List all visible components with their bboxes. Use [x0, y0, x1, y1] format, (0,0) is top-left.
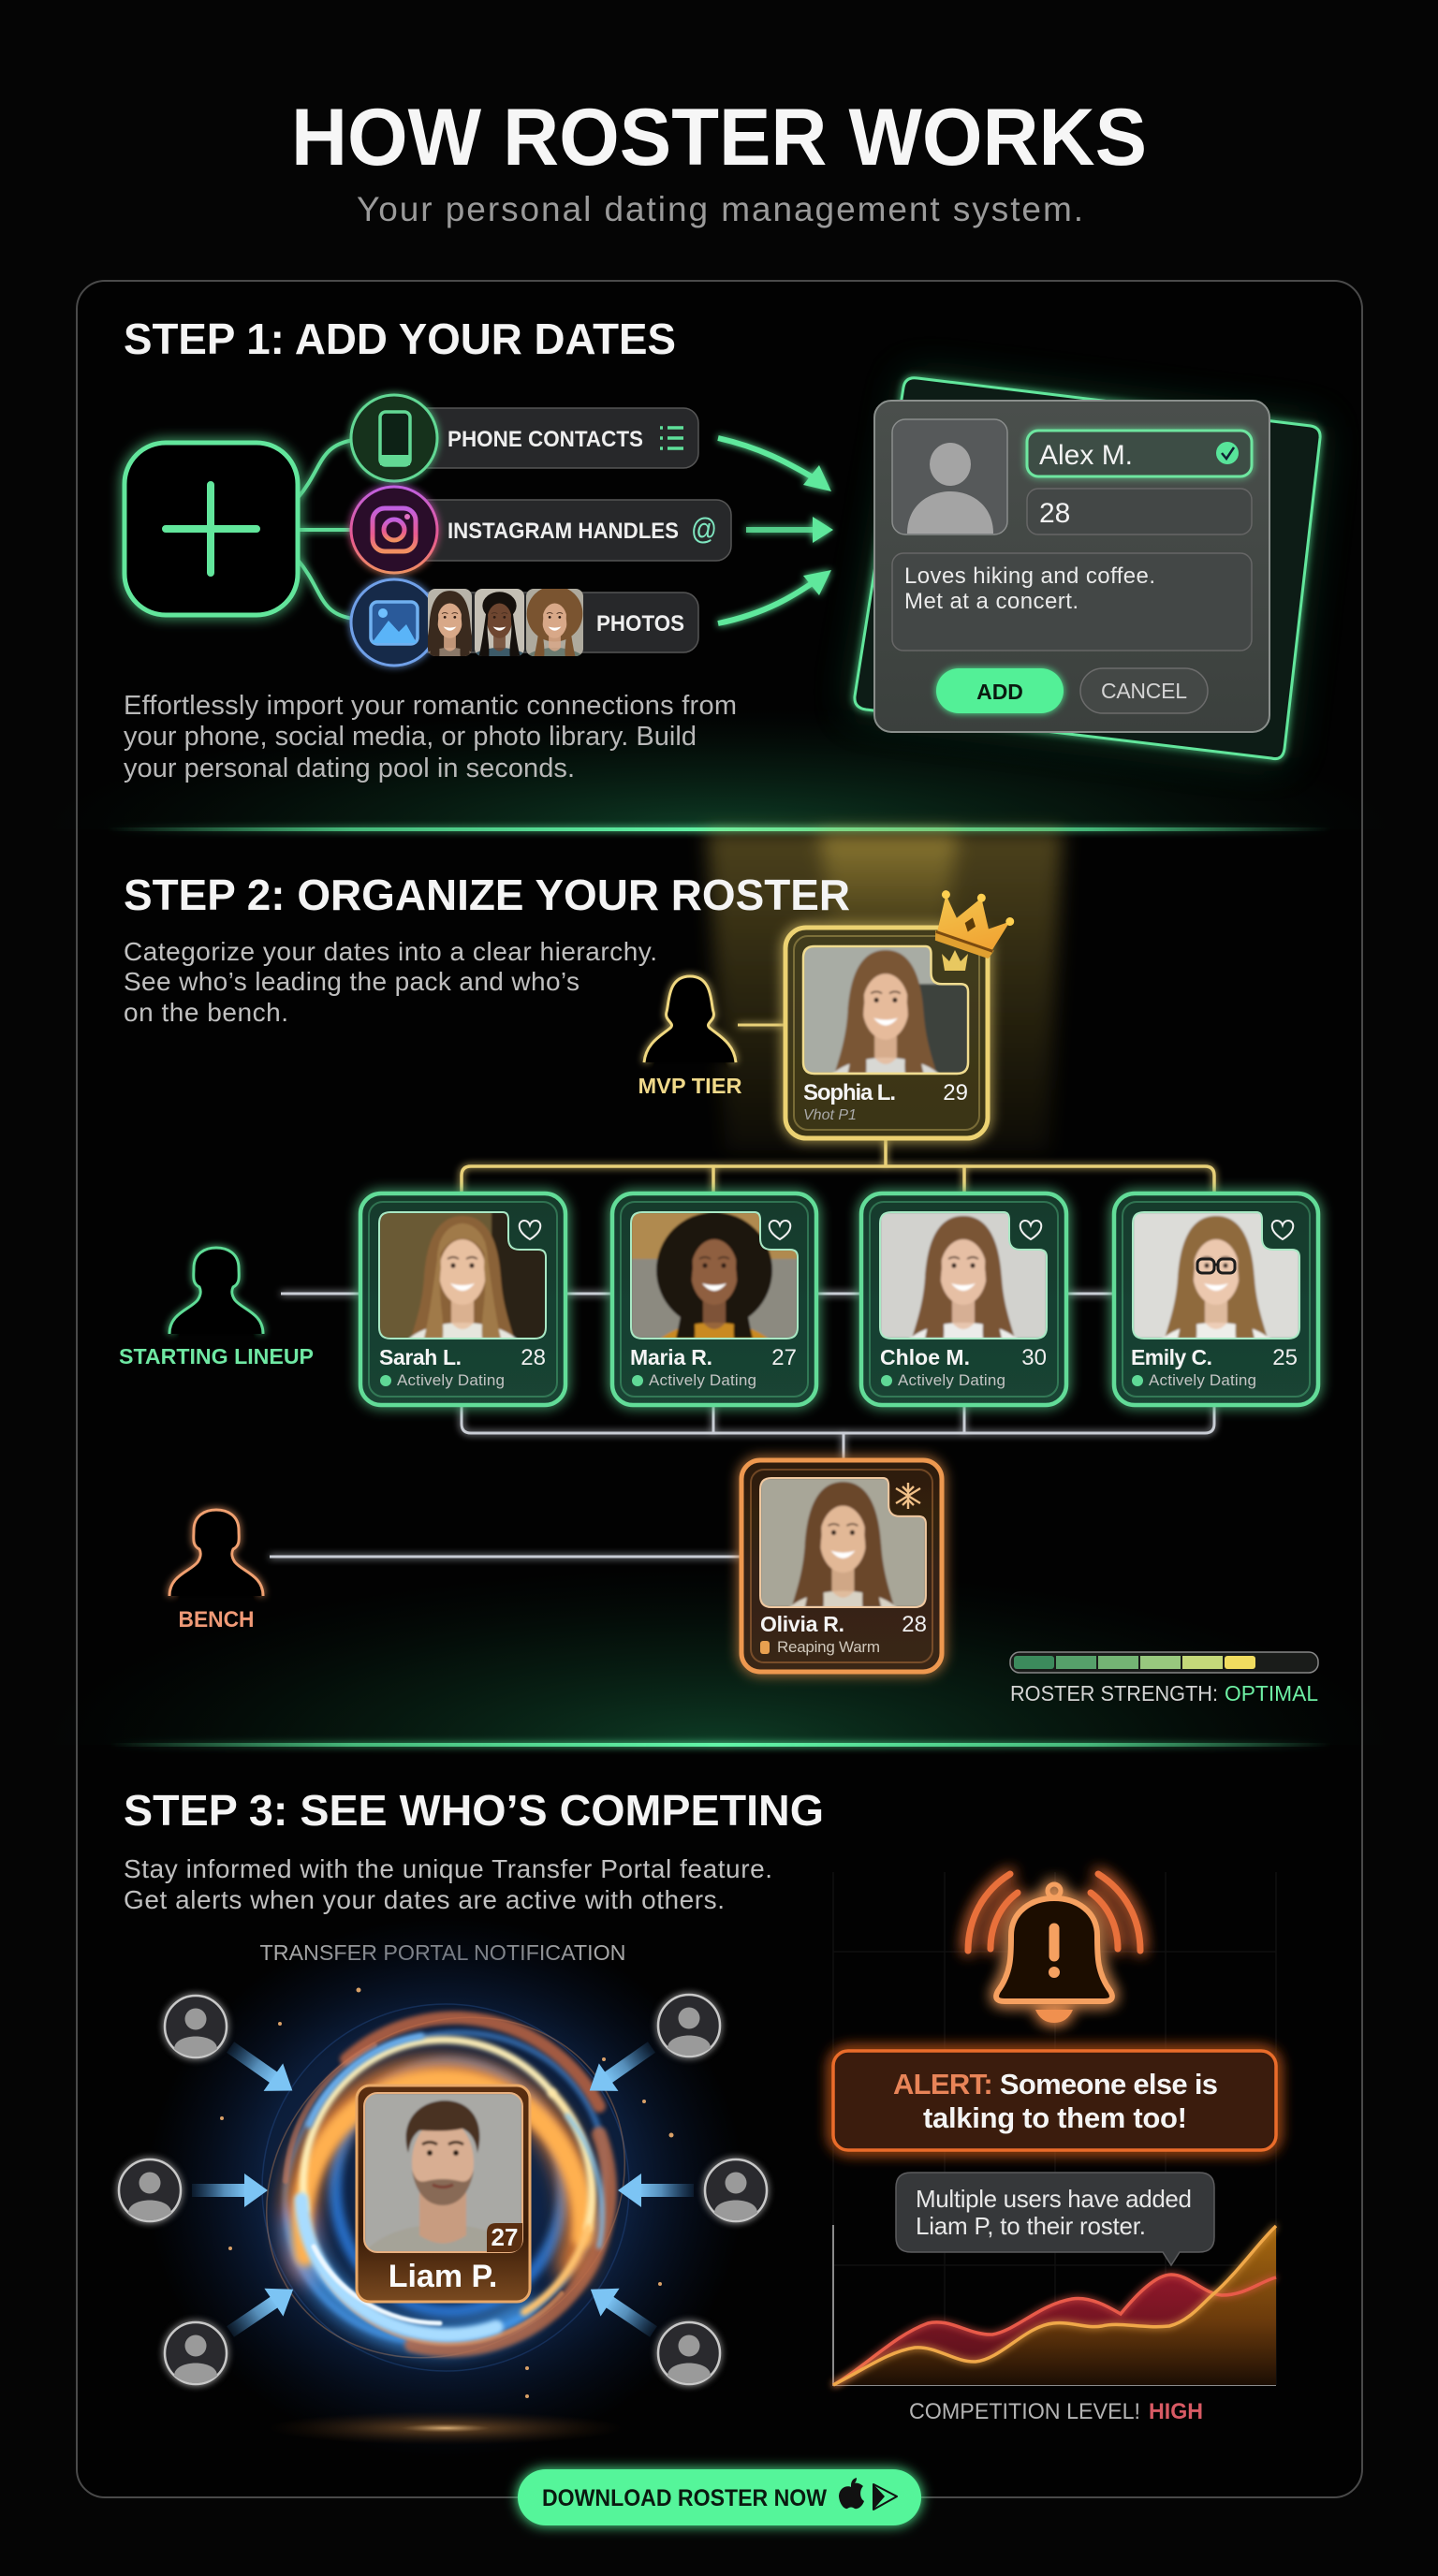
- cancel button: [1080, 668, 1208, 713]
- chart grid: [833, 1872, 1276, 2385]
- incoming users: avatars: [119, 1995, 767, 2384]
- photo thumbnail 3: [526, 589, 583, 656]
- arrows to form: [718, 438, 833, 623]
- step 1 description: Effortlessly import your romantic connections from: [124, 691, 737, 721]
- card: Emily C.: Emily C.: [1131, 1345, 1212, 1369]
- step 2 description: [124, 937, 657, 1027]
- connectors from plus box: [298, 440, 354, 619]
- title: HOW ROSTER WORKS: [291, 93, 1147, 183]
- age field: 28: [1039, 498, 1070, 529]
- bio field: [892, 553, 1252, 651]
- tier label: starting lineup: [119, 1248, 314, 1368]
- step 2 description: on the bench.: [124, 998, 288, 1027]
- panel: step 3: [119, 1786, 1276, 2459]
- alert callout: talking to them too!: [923, 2101, 1187, 2134]
- icon: play store: [873, 2484, 897, 2510]
- form: tilted back card: [855, 378, 1320, 759]
- icon: crown: [927, 881, 1020, 963]
- form: glass card: [874, 401, 1269, 732]
- photo thumbnail 2: [475, 589, 524, 656]
- download button: DOWNLOAD ROSTER NOW: [542, 2485, 827, 2511]
- portal: floor glow: [268, 2411, 624, 2445]
- small crown icon: [942, 950, 968, 971]
- form: green glow behind: [854, 378, 1319, 759]
- card: Sarah L.: [360, 1193, 565, 1405]
- name field: Alex M.: [1039, 440, 1133, 471]
- step 1 heading: STEP 1: ADD YOUR DATES: [124, 315, 676, 363]
- card: Liam P.: [357, 2086, 530, 2321]
- panel: step 2: [119, 831, 1318, 1705]
- tier label: MVP: [638, 976, 742, 1098]
- card: Sarah L.: Actively Dating: [397, 1371, 505, 1389]
- step 1 description: your phone, social media, or photo library. Build: [124, 722, 697, 752]
- roster strength meter: OPTIMAL: [1225, 1681, 1318, 1705]
- icon: phone: [351, 395, 437, 481]
- download button: [518, 2469, 921, 2525]
- tooltip: Multiple users have added: [916, 2185, 1192, 2213]
- portal: sparks: [220, 1988, 674, 2398]
- card: Sophia L. MVP: [785, 928, 988, 1138]
- card: Sarah L.: 28: [521, 1345, 546, 1370]
- card: Emily C.: Actively Dating: [1149, 1371, 1256, 1389]
- card: Chloe M.: 30: [1021, 1345, 1047, 1370]
- tier label: MVP: MVP TIER: [638, 1074, 742, 1098]
- card: Maria R.: 27: [771, 1345, 797, 1370]
- card: Chloe M.: Actively Dating: [898, 1371, 1005, 1389]
- card: Maria R.: Actively Dating: [649, 1371, 756, 1389]
- snowflake icon: [896, 1483, 920, 1509]
- step 3 description: Get alerts when your dates are active with others.: [124, 1885, 725, 1914]
- photo thumbnail 1: [428, 589, 472, 656]
- transfer portal label: TRANSFER PORTAL NOTIFICATION: [260, 1940, 625, 1965]
- card: Emily C.: 25: [1272, 1345, 1298, 1370]
- icon: alert bell: [968, 1874, 1140, 2023]
- alert callout: [833, 2051, 1276, 2150]
- source: photos pill: PHOTOS: [596, 611, 684, 637]
- card: Olivia R.: 28: [902, 1612, 927, 1637]
- source: photos pill: [412, 593, 698, 652]
- roster strength meter: [1010, 1652, 1318, 1705]
- icon: apple: [839, 2478, 864, 2509]
- source: instagram handles pill: @: [691, 512, 717, 546]
- tooltip: Liam P, to their roster.: [916, 2212, 1146, 2240]
- add button: [936, 668, 1064, 713]
- card: Olivia R.: [741, 1460, 942, 1672]
- step 2 description: See who’s leading the pack and who’s: [124, 967, 580, 996]
- bio field: Loves hiking and coffee.: [904, 564, 1155, 589]
- roster strength meter: ROSTER STRENGTH:: [1010, 1681, 1218, 1705]
- tree connectors: gold: [462, 1025, 1214, 1193]
- age field: [1027, 489, 1252, 534]
- background haze: step 1 bottom: [200, 736, 1238, 827]
- step 2 description: Categorize your dates into a clear hierarchy.: [124, 937, 657, 966]
- source: phone contacts pill: [412, 408, 698, 468]
- tier label: starting lineup: STARTING LINEUP: [119, 1344, 314, 1368]
- panel: step 1: [124, 315, 1320, 783]
- name field: [1027, 431, 1252, 476]
- step 3 description: Stay informed with the unique Transfer Portal feature.: [124, 1854, 772, 1883]
- spotlight: [707, 831, 1063, 1151]
- alert callout: ALERT: Someone else is: [893, 2068, 1218, 2100]
- incoming users: arrows: [192, 2033, 694, 2346]
- card: Liam P.: Liam P.: [389, 2259, 497, 2294]
- card: Maria R.: [612, 1193, 816, 1405]
- source: phone contacts pill: PHONE CONTACTS: [448, 427, 643, 452]
- tree connectors: silver: [270, 1294, 1214, 1557]
- card: Chloe M.: Chloe M.: [880, 1345, 970, 1369]
- card: Liam P.: 27: [492, 2223, 518, 2251]
- tier label: bench: [169, 1510, 263, 1632]
- source: instagram handles pill: INSTAGRAM HANDLES: [448, 519, 679, 544]
- tier label: bench: BENCH: [178, 1607, 255, 1632]
- chart label: HIGH: [1149, 2399, 1203, 2424]
- step 3 heading: STEP 3: SEE WHO’S COMPETING: [124, 1786, 824, 1835]
- card: Sarah L.: Sarah L.: [379, 1345, 462, 1369]
- divider 1: [107, 827, 1331, 831]
- icon: plus box: [125, 443, 298, 615]
- bio field: Met at a concert.: [904, 589, 1078, 614]
- card: Olivia R.: Olivia R.: [760, 1612, 844, 1636]
- tooltip: [896, 2173, 1214, 2265]
- step 1 description: your personal dating pool in seconds.: [124, 754, 575, 783]
- cancel button: CANCEL: [1101, 679, 1187, 703]
- icon: instagram: [351, 487, 437, 573]
- step 1 description: [124, 691, 737, 783]
- background haze: step 2 bottom: [200, 1608, 1238, 1743]
- card: Emily C.: [1114, 1193, 1318, 1405]
- card: Olivia R.: Reaping Warm: [777, 1638, 880, 1656]
- card: Sophia L. MVP: Vhot P1: [803, 1107, 857, 1123]
- card: Sophia L. MVP: Sophia L.: [803, 1080, 896, 1105]
- portal: blue backdrop: [146, 1916, 745, 2459]
- add button: ADD: [976, 680, 1023, 704]
- step 3 description: [124, 1854, 772, 1914]
- card: Maria R.: Maria R.: [630, 1345, 712, 1369]
- portal: swirling ring: [200, 1948, 691, 2427]
- step 2 heading: STEP 2: ORGANIZE YOUR ROSTER: [124, 871, 850, 919]
- card: Sophia L. MVP: 29: [943, 1080, 968, 1105]
- avatar placeholder: [892, 419, 1007, 534]
- source: instagram handles pill: [412, 500, 731, 561]
- divider 2: [110, 1743, 1331, 1747]
- card: Chloe M.: [861, 1193, 1066, 1405]
- icon: photos: [351, 579, 437, 666]
- competition chart: [833, 2225, 1276, 2385]
- chart label: COMPETITION LEVEL!: [909, 2399, 1140, 2424]
- main panel: [77, 281, 1362, 2497]
- subtitle: Your personal dating management system.: [357, 190, 1083, 228]
